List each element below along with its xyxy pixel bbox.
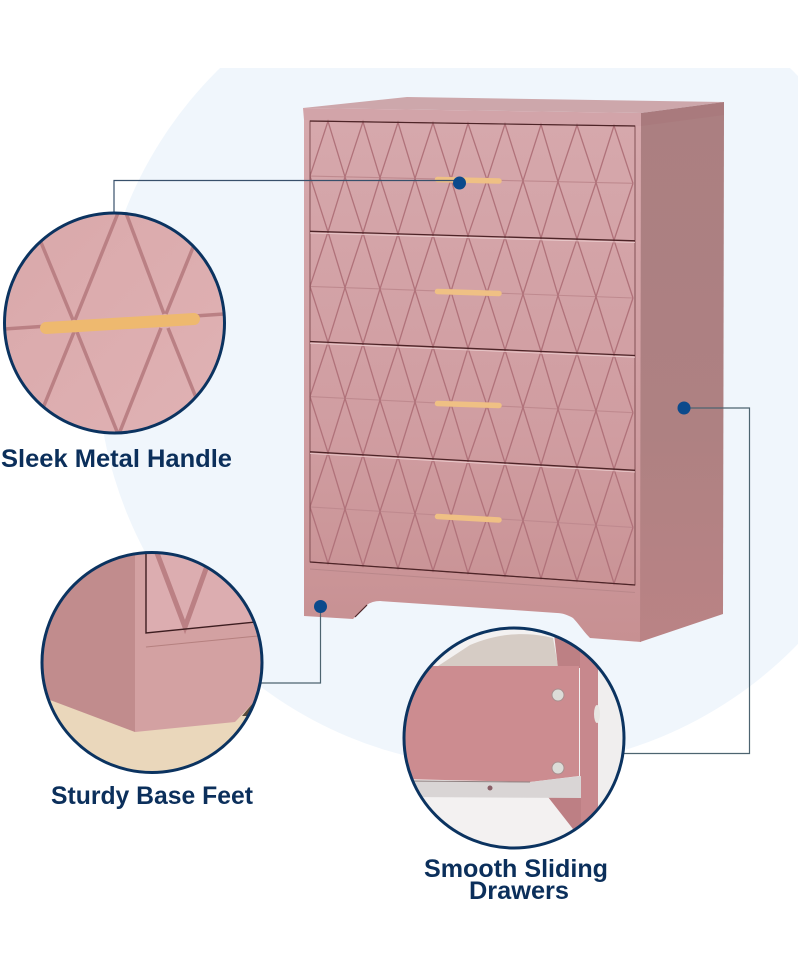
chest top front lip (303, 108, 641, 126)
ring (4, 213, 224, 433)
handle (46, 319, 194, 328)
detail circle: smooth sliding drawers (400, 625, 628, 851)
marker dot: base (314, 600, 327, 613)
roller knob (594, 705, 600, 723)
relief V (157, 553, 207, 627)
chest front face (304, 118, 641, 642)
pillow (438, 634, 558, 666)
cabinet upright (580, 652, 598, 824)
label: sturdy base feet: Sturdy Base Feet (51, 782, 254, 810)
label: smooth sliding drawers: Drawers (469, 877, 569, 905)
drawer frame and dividers (310, 121, 635, 585)
notch shadow (242, 704, 252, 716)
chest top side lip (641, 102, 724, 126)
screw (552, 689, 564, 701)
drawer handles (438, 180, 499, 520)
label: smooth sliding drawers: Smooth Sliding (424, 855, 608, 883)
white drawer side (598, 625, 628, 835)
detail circle: sleek metal handle (0, 210, 230, 436)
notch shadow (355, 605, 367, 617)
chest top surface (303, 97, 724, 113)
trim line (146, 636, 258, 647)
drawer front (147, 554, 252, 632)
leader line: base feet (260, 606, 320, 683)
marker dot: handle (453, 176, 466, 190)
diamond relief pattern (310, 121, 633, 584)
ring (404, 628, 624, 848)
label: smooth sliding drawers (424, 855, 608, 905)
drawer panel (400, 666, 579, 782)
lower triangle (548, 797, 581, 830)
background pale blue circle (104, 68, 798, 755)
leader line: side to drawers (622, 408, 750, 754)
rail hole (488, 786, 492, 790)
detail circle: sturdy base feet (40, 550, 265, 775)
half-drawer lines (310, 176, 633, 527)
chest side panel (640, 113, 724, 642)
relief lines (4, 213, 224, 434)
side of the cabinet (40, 550, 135, 732)
ring (42, 552, 262, 772)
base trim line (310, 569, 635, 592)
chest of drawers (303, 97, 724, 642)
leader line: handle (114, 180, 459, 213)
label: sleek metal handle: Sleek Metal Handle (1, 445, 232, 473)
drawer frame (146, 550, 256, 633)
screw (552, 762, 564, 774)
front of the cabinet (135, 550, 265, 732)
cabinet inner wall (554, 638, 580, 668)
metal rail (400, 776, 581, 798)
marker dot: side (678, 402, 690, 414)
